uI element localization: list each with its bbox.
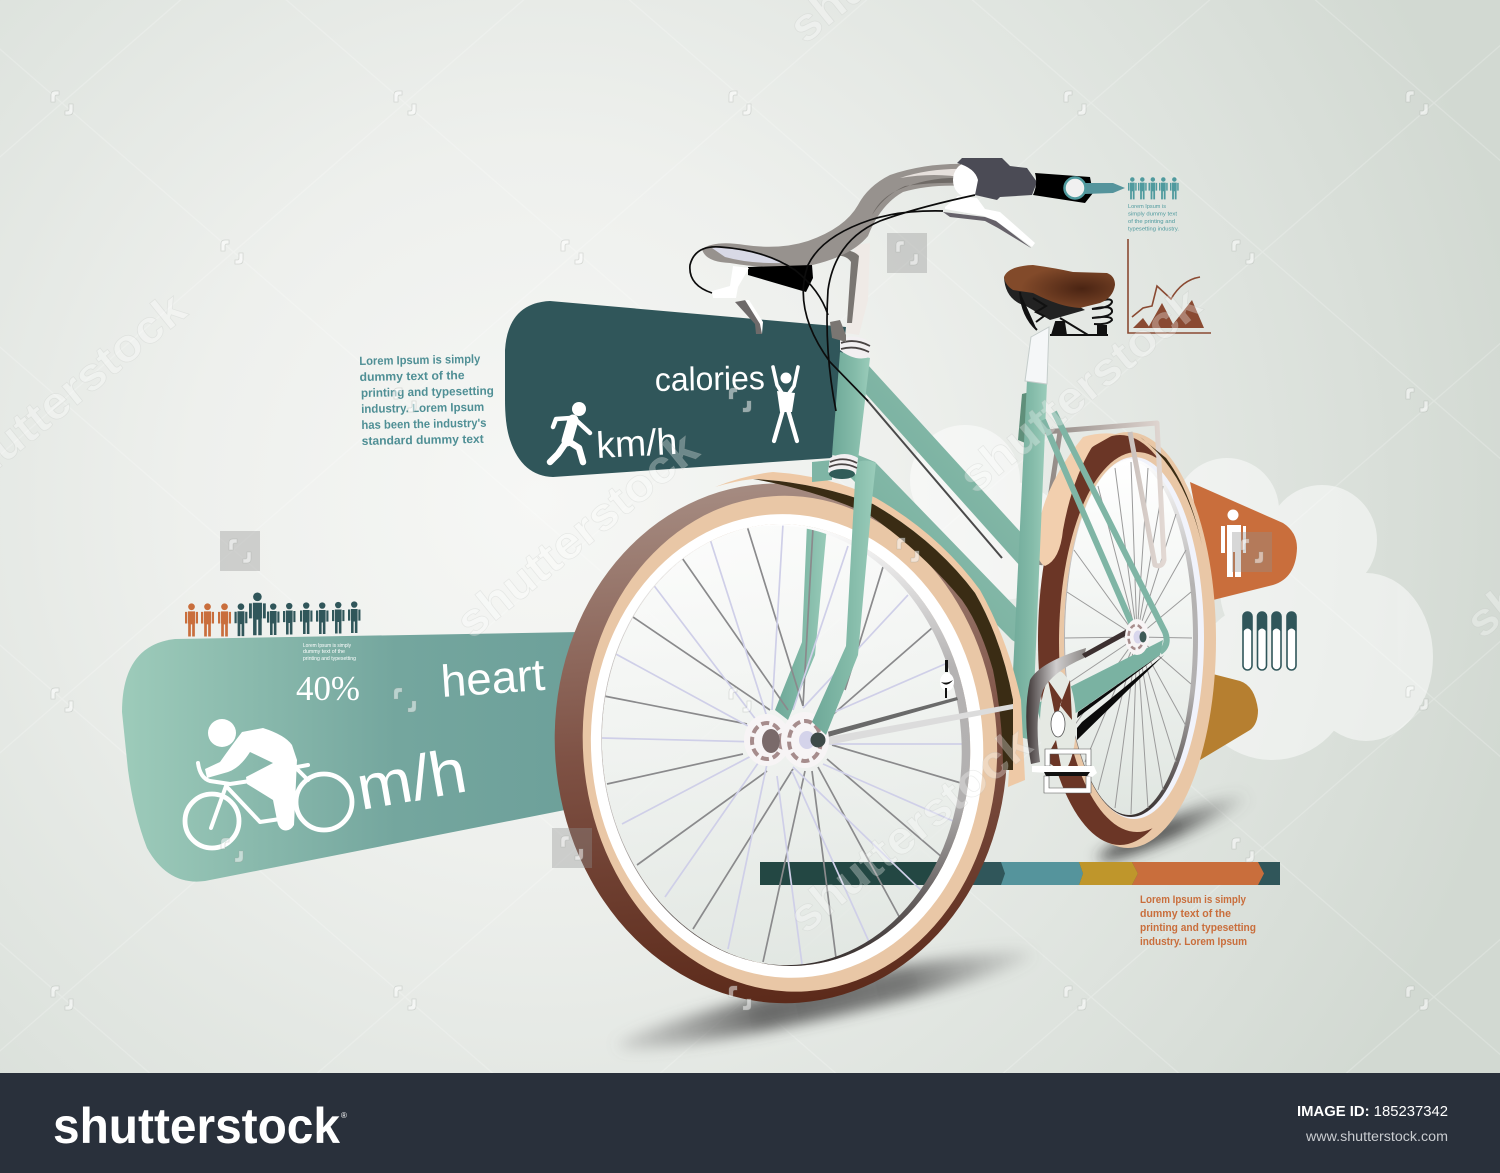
brake rod and reflector [827,660,1013,745]
watermark squares [220,233,1272,868]
panel: orange tag [1190,482,1297,600]
rear fender [1037,433,1115,566]
panel: gold tag [1200,672,1258,760]
fork and hubs [744,336,876,768]
upper headset ring [840,336,870,358]
front hub [781,712,829,768]
icon: walker [550,402,590,462]
text block: left paragraph: industry. Lorem Ipsum [361,400,484,416]
right lever [943,196,1035,248]
40 percent: 40% [296,669,360,708]
black chain [1077,655,1164,740]
chainring [1040,671,1076,775]
timeline bar [760,862,1280,885]
footer logo: shutterstock [53,1098,340,1154]
km/h label: km/h [595,421,678,466]
icon: four level bars [1243,612,1296,670]
registered mark: ® [341,1111,347,1120]
stem [830,243,870,342]
text block: left paragraph [359,352,495,448]
watermark text: shutterstock [446,421,708,648]
watermark icons [51,91,1428,1010]
text block: top right: typesetting industry. [1128,226,1179,232]
spokes gray [604,526,961,962]
area chart [1128,239,1211,333]
text block: left paragraph: printing and typesetting [361,384,494,400]
rear wheel [1038,432,1216,848]
spokes lavender [602,524,962,964]
chain stay [1036,640,1163,735]
text block: orange paragraph: industry. Lorem Ipsum [1140,936,1247,948]
shadow: rear wheel [1094,788,1250,868]
rear spokes [1065,462,1192,814]
grip end button [1064,178,1086,198]
seat stay [1043,412,1167,652]
text block: left paragraph: has been the industry's [361,416,487,432]
top tube [864,365,1035,566]
small text [303,643,356,662]
text block: left paragraph: dummy text of the [359,368,465,384]
footer bar [0,1073,1500,1173]
text block: left paragraph: Lorem Ipsum is simply [359,352,481,368]
left grip black [748,265,813,292]
watermark text: shutterstock [779,716,1041,943]
seat [1004,265,1115,335]
head tube [832,352,870,460]
icon: arms-up figure [773,367,798,441]
watermark text: shutterstock [949,276,1211,503]
rear rack [1040,423,1164,566]
wheel interior [587,512,985,978]
text block: orange paragraph [1140,894,1256,948]
icon: cyclist [185,719,352,848]
text block: orange paragraph: dummy text of the [1140,908,1231,920]
seat tube [1010,380,1047,740]
text block: orange paragraph: Lorem Ipsum is simply [1140,894,1247,906]
clouds [910,425,1433,760]
shadow tube [1018,392,1030,445]
panel: calories dark teal [505,301,846,477]
lower collar [812,460,832,482]
right grip black [1033,173,1093,203]
website: www.shutterstock.com [1305,1129,1448,1144]
rear fender dark edge [1140,437,1202,545]
text block: top right: Lorem Ipsum is [1128,204,1166,210]
right grip collar [953,163,981,197]
handlebar [690,158,1125,411]
front fork leg [812,460,876,735]
text block: top right: of the printing and [1128,219,1175,225]
down tube [848,455,1030,650]
back fork leg [775,500,828,720]
frame [848,327,1167,740]
text block: orange paragraph: printing and typesetting [1140,922,1256,934]
lower headset ring [828,454,858,479]
back hub [744,714,790,766]
icon: person on orange tag [1221,510,1246,577]
text block: top right [1128,204,1179,232]
right grip body [957,158,1037,200]
text block: top right: simply dummy text [1128,212,1178,218]
front fender [715,472,1025,787]
m/h label: m/h [351,736,472,824]
front wheel [537,468,1024,1018]
small text: Lorem Ipsum is simply [303,643,351,649]
panel: heart teal [122,632,580,882]
text block: left paragraph: standard dummy text [362,432,484,448]
icon row: top right people [1128,177,1179,199]
rings [537,468,1024,1018]
brake cable [867,400,1002,558]
left lever [712,266,763,334]
icon row: people above heart panel [185,592,360,636]
axle [810,732,826,748]
heart label: heart [439,649,547,707]
chain guard [1026,648,1086,764]
small text: dummy text of the [303,649,345,655]
rear hub [1125,619,1149,655]
teal arrow [1085,183,1125,194]
bar through wheel [760,862,960,885]
shadow: front wheel [614,937,1036,1063]
image id: IMAGE ID: 185237342 [1297,1104,1448,1120]
small text: printing and typesetting [303,656,356,662]
crank and chain [1026,619,1164,793]
pedal [1032,749,1097,793]
calories label: calories [654,359,765,398]
seat post [1025,327,1049,384]
cables [690,195,975,411]
